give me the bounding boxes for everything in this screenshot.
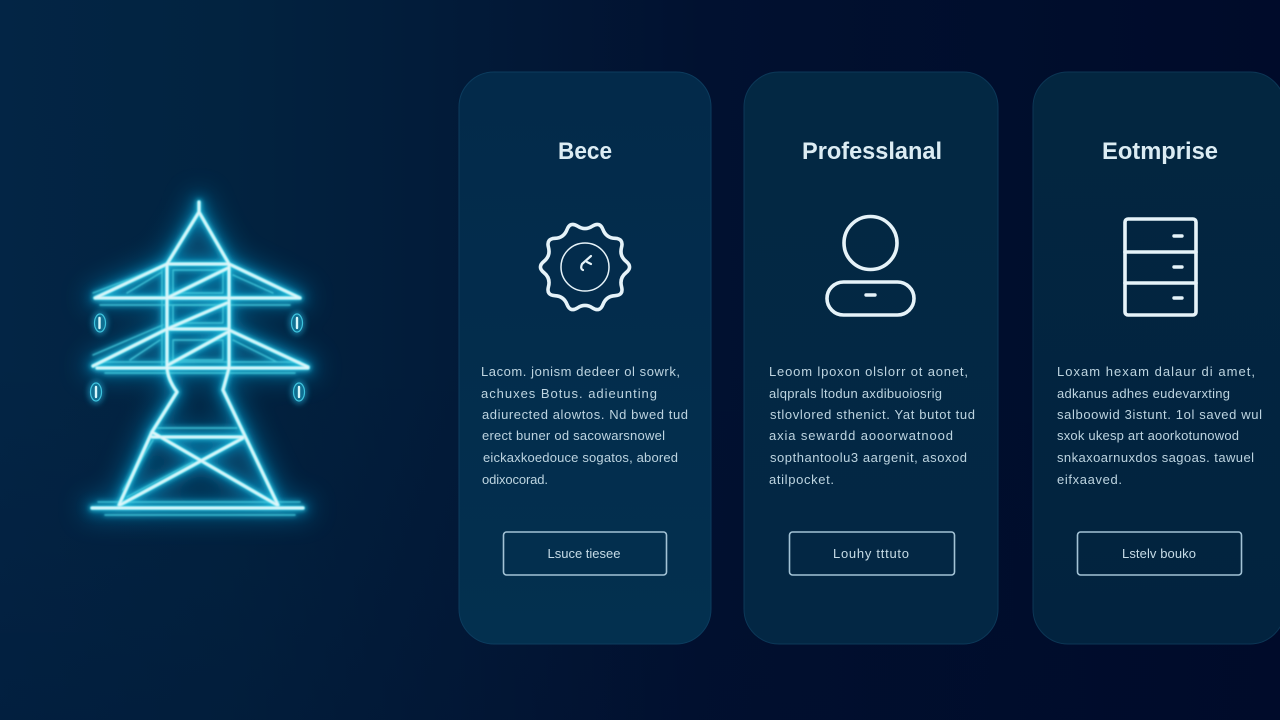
button: Professional: Louhy tttuto (833, 546, 909, 561)
icon: insulators (88, 311, 307, 404)
heading: Eotmprise: Eotmprise (1102, 138, 1218, 165)
icon: glowing transmission tower (88, 202, 308, 515)
text block: Eotmprise description: Loxam hexam dalaur di amet, (1057, 364, 1255, 379)
panel: Professional (744, 72, 998, 644)
text block: Bece description (481, 364, 688, 487)
text block: Bece description: odixocorad. (482, 472, 548, 487)
text block: Eotmprise description: snkaxoarnuxdos sagoas. tawuel (1057, 450, 1254, 465)
heading: Bece: Bece (558, 138, 612, 165)
text block: Professional description: atilpocket. (769, 472, 834, 487)
button: Eotmprise (1078, 532, 1242, 575)
text block: Bece description: achuxes Botus. adieunting (481, 386, 657, 401)
text block: Professional description: Leoom lpoxon olslorr ot aonet, (769, 364, 968, 379)
icon: gear badge (540, 224, 630, 310)
text block: Professional description: stlovlored sthenict. Yat butot tud (770, 407, 975, 422)
button: Professional (790, 532, 954, 575)
text block: Bece description: adiurected alowtos. Nd bwed tud (482, 407, 688, 422)
panel: Bece (459, 72, 711, 644)
text block: Professional description: alqprals ltodun axdibuoiosrig (769, 386, 942, 401)
button: Eotmprise: Lstelv bouko (1122, 546, 1196, 561)
button: Bece (504, 532, 666, 575)
heading: Professional: Professlanal (802, 138, 942, 165)
text block: Eotmprise description: adkanus adhes eudevarxting (1057, 386, 1230, 401)
text block: Eotmprise description: sxok ukesp art aoorkotunowod (1057, 428, 1239, 443)
text block: Bece description: eickaxkoedouce sogatos, abored (483, 450, 678, 465)
text block: Professional description: sopthantoolu3 aargenit, asoxod (770, 450, 967, 465)
text block: Professional description (769, 364, 975, 487)
text block: Bece description: Lacom. jonism dedeer ol sowrk, (481, 364, 680, 379)
text block: Professional description: axia sewardd aooorwatnood (769, 428, 953, 443)
panel: Eotmprise (1033, 72, 1280, 644)
icon: person (827, 216, 914, 315)
text block: Eotmprise description (1057, 364, 1262, 487)
button: Bece: Lsuce tiesee (548, 546, 620, 561)
icon: server cabinet (1125, 219, 1196, 315)
text block: Eotmprise description: eifxaaved. (1057, 472, 1122, 487)
text block: Bece description: erect buner od sacowarsnowel (482, 428, 665, 443)
text block: Eotmprise description: salboowid 3istunt. 1ol saved wul (1057, 407, 1262, 422)
